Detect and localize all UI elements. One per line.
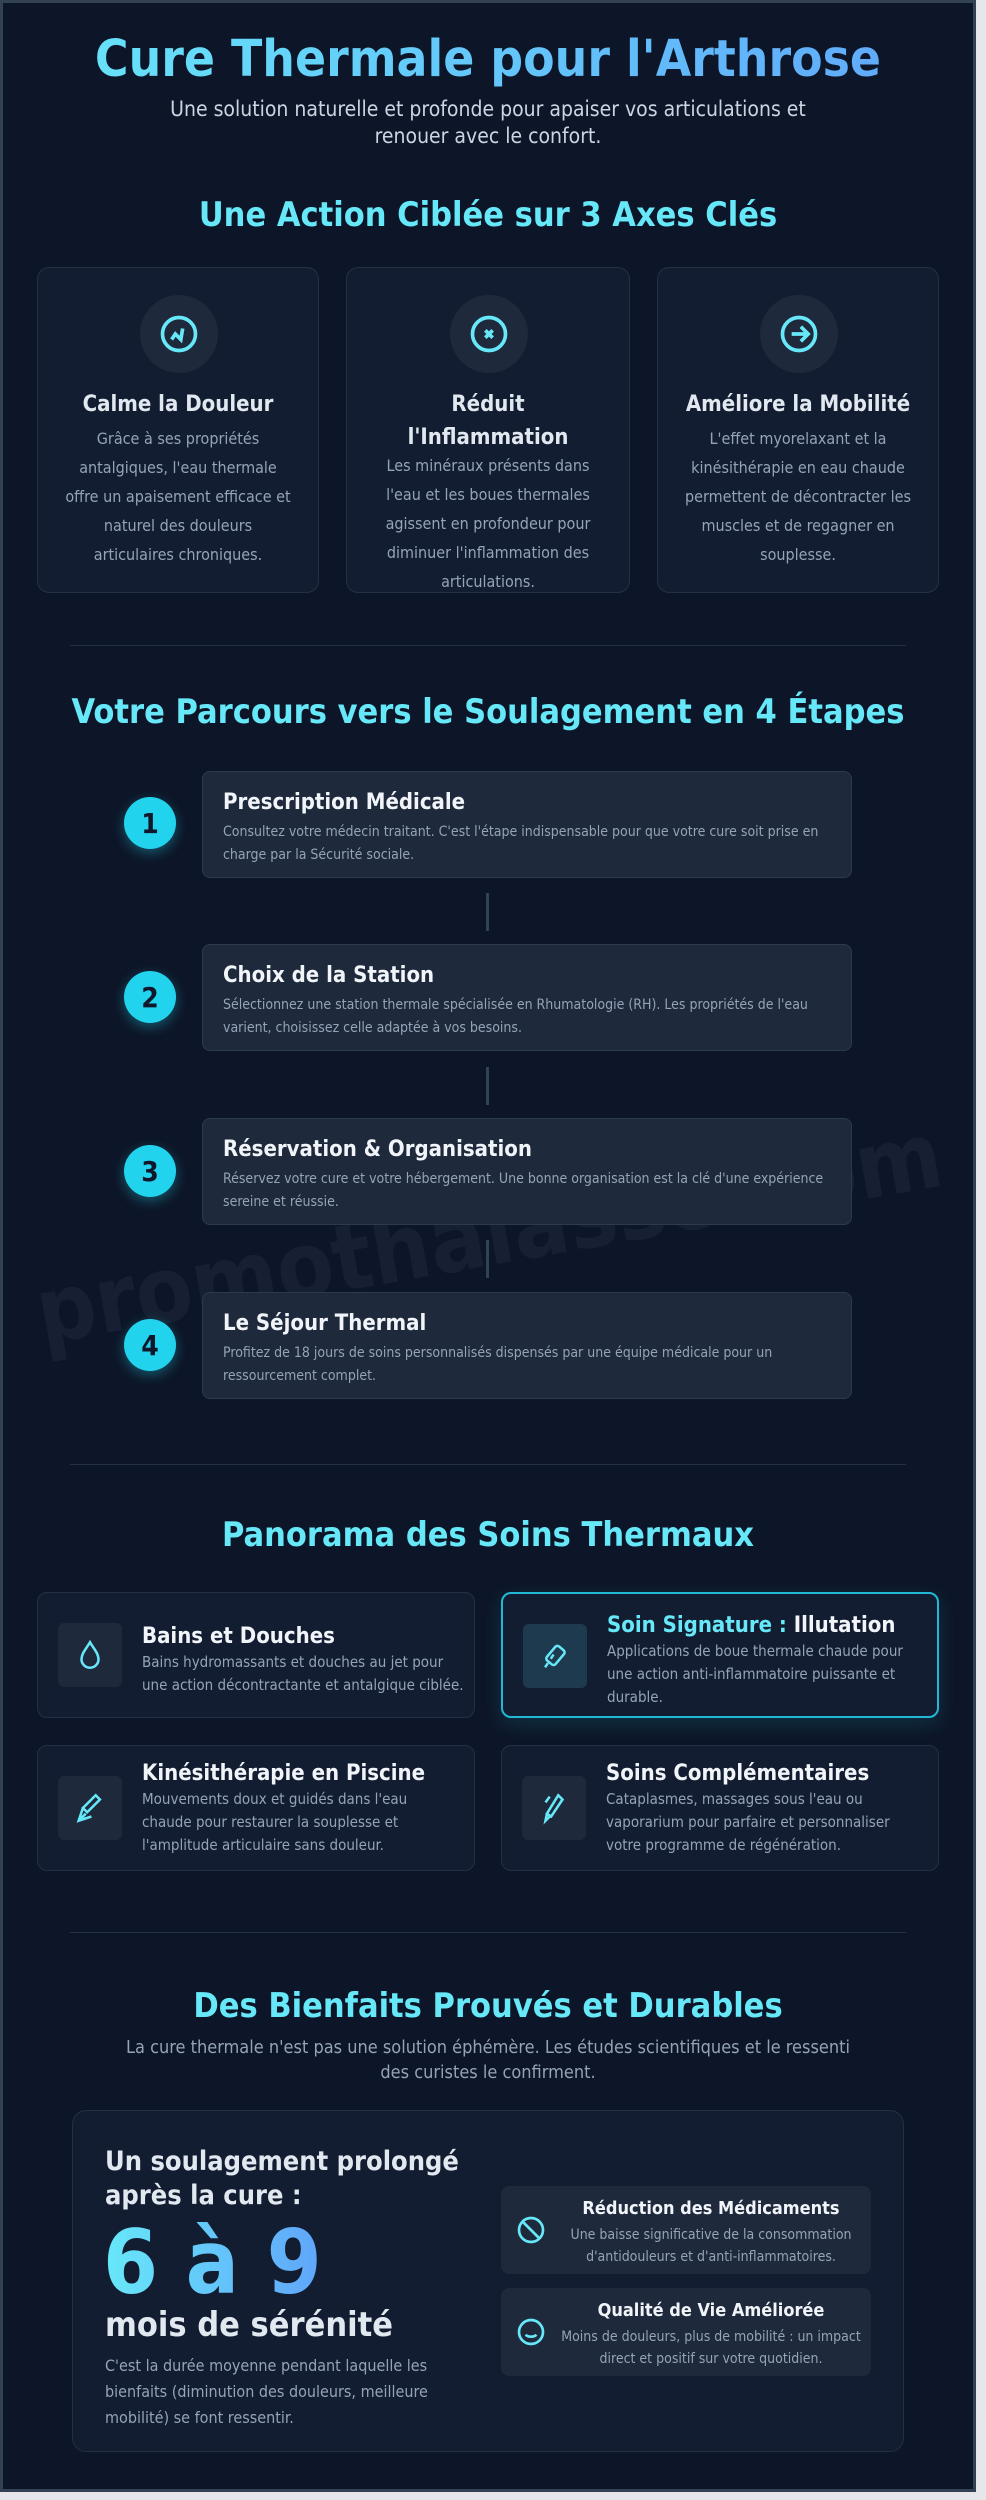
box: médicaments: Une baisse significative de la consommation d'antidouleurs et d'anti-inflammatoires. [570, 2227, 852, 2265]
soin: kiné: Kinésithérapie en Piscine [142, 1761, 425, 1786]
step 1 number: 1 [141, 806, 159, 840]
step 1: Prescription Médicale [223, 790, 465, 815]
title: Cure Thermale pour l'Arthrose [95, 30, 881, 89]
soin: complémentaires: Soins Complémentaires [606, 1761, 869, 1786]
step 3: Réservez votre cure et votre hébergement. Une bonne organisation est la clé d'une expérience sereine et réussie. [223, 1171, 823, 1210]
box: qualité de vie [501, 2288, 871, 2376]
step 3 [202, 1118, 852, 1225]
text: Les minéraux présents dans l'eau et les boues thermales agissent en profondeur pour diminuer l'inflammation des articulations. [386, 456, 590, 591]
card: inflammation [346, 267, 630, 593]
subheading: Un soulagement prolongé [105, 2146, 459, 2177]
heading: 3 axes: Une Action Ciblée sur 3 Axes Clés [199, 195, 777, 235]
step 4 number [124, 1319, 176, 1371]
soin: bains [37, 1592, 475, 1718]
icon: inflammation [450, 295, 528, 373]
big number: 6 à 9 [103, 2211, 322, 2314]
title: Réduit [451, 392, 525, 417]
watermark: promothalasso.com [28, 1101, 950, 1366]
box: qualité de vie: Qualité de Vie Améliorée [598, 2300, 824, 2321]
description: C'est la durée moyenne pendant laquelle les bienfaits (diminution des douleurs, meilleure mobilité) se font ressentir. [105, 2356, 428, 2427]
unit: mois de sérénité [105, 2305, 393, 2345]
box: médicaments [501, 2186, 871, 2274]
subtitle: Une solution naturelle et profonde pour apaiser vos articulations et renouer avec le confort. [170, 97, 806, 148]
subheading [105, 2146, 459, 2211]
card: douleur [37, 267, 319, 593]
soin: complémentaires [501, 1745, 939, 1871]
card: mobilité [657, 267, 939, 593]
step 1 number [124, 797, 176, 849]
panel: bienfaits [72, 2110, 904, 2452]
title: Calme la Douleur [83, 392, 273, 417]
step 2 [202, 944, 852, 1051]
icon: arrow [760, 295, 838, 373]
step 3 number: 3 [141, 1154, 159, 1188]
step 3: Réservation & Organisation [223, 1137, 532, 1162]
step 4: Le Séjour Thermal [223, 1311, 426, 1336]
box: qualité de vie: Moins de douleurs, plus de mobilité : un impact direct et positif sur votre quotidien. [561, 2329, 861, 2367]
text: Grâce à ses propriétés antalgiques, l'eau thermale offre un apaisement efficace et naturel des douleurs articulaires chroniques. [65, 429, 291, 564]
heading: soins: Panorama des Soins Thermaux [222, 1515, 754, 1555]
soin: kiné: Mouvements doux et guidés dans l'eau chaude pour restaurer la souplesse et l'amplitude articulaire sans douleur. [142, 1790, 407, 1854]
icon: ban [518, 2216, 544, 2244]
soin: illutation: Soin Signature : Illutation [607, 1613, 895, 1638]
intro text: La cure thermale n'est pas une solution éphémère. Les études scientifiques et le ressenti des curistes le confirment. [126, 2037, 850, 2083]
step 2 number [124, 971, 176, 1023]
step 2: Sélectionnez une station thermale spécialisée en Rhumatologie (RH). Les propriétés de l'eau varient, choisissez celle adaptée à vos besoins. [223, 997, 808, 1036]
soin: illutation: Applications de boue thermale chaude pour une action anti-inflammatoire puissante et durable. [607, 1642, 903, 1706]
icon: smile [518, 2318, 544, 2346]
step 4: Profitez de 18 jours de soins personnalisés dispensés par une équipe médicale pour un ressourcement complet. [223, 1345, 772, 1384]
icon: pain [140, 295, 218, 373]
icon: mud [523, 1624, 587, 1688]
title: l'Inflammation [408, 425, 568, 450]
heading: parcours: Votre Parcours vers le Soulagement en 4 Étapes [72, 692, 904, 732]
soin: bains: Bains et Douches [142, 1624, 335, 1649]
soin: bains: Bains hydromassants et douches au jet pour une action décontractante et antalgique ciblée. [142, 1653, 464, 1694]
step 2: Choix de la Station [223, 963, 434, 988]
icon: brush [522, 1776, 586, 1840]
box: médicaments: Réduction des Médicaments [582, 2198, 840, 2219]
step 4 [202, 1292, 852, 1399]
step 4 number: 4 [141, 1328, 159, 1362]
soin: kiné [37, 1745, 475, 1871]
title [408, 392, 568, 450]
step 3 number [124, 1145, 176, 1197]
soin: illutation [501, 1592, 939, 1718]
step 1: Consultez votre médecin traitant. C'est l'étape indispensable pour que votre cure soit prise en charge par la Sécurité sociale. [223, 824, 818, 863]
heading: bienfaits: Des Bienfaits Prouvés et Durables [193, 1986, 783, 2026]
subheading: après la cure : [105, 2180, 302, 2211]
step 2 number: 2 [141, 980, 159, 1014]
title: Améliore la Mobilité [686, 392, 910, 417]
title [0, 25, 976, 95]
soin: complémentaires: Cataplasmes, massages sous l'eau ou vaporarium pour parfaire et personnaliser votre programme de régénération. [606, 1790, 890, 1854]
icon: kine [58, 1776, 122, 1840]
step 1 [202, 771, 852, 878]
text: L'effet myorelaxant et la kinésithérapie en eau chaude permettent de décontracter les muscles et de regagner en souplesse. [685, 429, 911, 564]
icon: drop [58, 1623, 122, 1687]
